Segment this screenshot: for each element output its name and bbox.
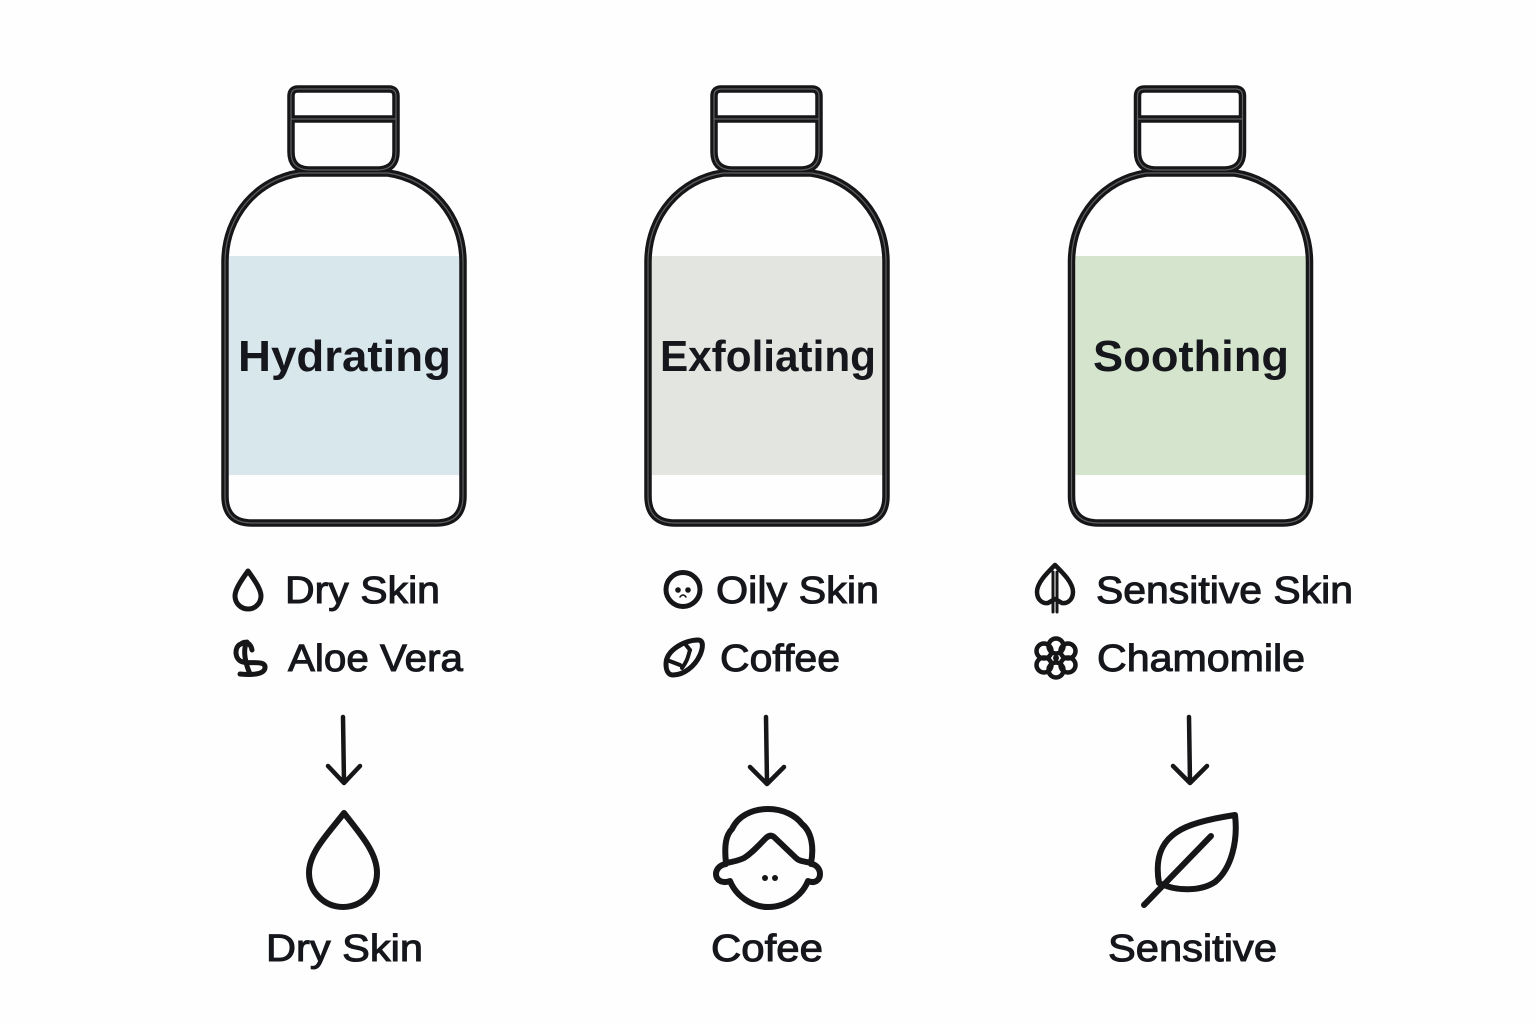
text: Cofee: Cofee: [711, 928, 823, 970]
text: Coffee: Coffee: [720, 638, 840, 680]
label: Hydrating: Hydrating: [238, 332, 451, 381]
text: Sensitive Skin: Sensitive Skin: [1096, 570, 1353, 612]
icon: coffee bean: [666, 640, 702, 675]
panel: exfoliating column: [648, 89, 886, 970]
text: Sensitive: Sensitive: [1108, 928, 1277, 970]
arrow: down: [1173, 717, 1207, 783]
icon: large leaf: [1144, 815, 1236, 905]
panel: soothing column: [1036, 89, 1353, 970]
text: Dry Skin result: Dry Skin: [266, 928, 423, 970]
text: Oily Skin: Oily Skin: [716, 570, 879, 612]
text: Chamomile: Chamomile: [1097, 638, 1305, 680]
icon: sensitive skin leaf: [1037, 565, 1073, 612]
icon: chamomile flower: [1036, 638, 1076, 678]
label: Soothing: Soothing: [1093, 332, 1289, 381]
text: Aloe Vera: Aloe Vera: [288, 638, 464, 680]
icon: face with hair: [716, 809, 820, 907]
panel: hydrating column: [225, 89, 464, 970]
text: Dry Skin: Dry Skin: [285, 570, 440, 612]
icon: small water drop: [235, 571, 261, 609]
label: Exfoliating: Exfoliating: [660, 332, 876, 381]
bottle: hydrating: [225, 89, 463, 523]
icon: large water drop: [309, 813, 377, 907]
bottle: exfoliating: [648, 89, 886, 523]
bottle: soothing: [1072, 89, 1310, 523]
icon: aloe vera: [236, 642, 265, 674]
icon: oily skin face: [666, 572, 700, 606]
arrow: down: [328, 717, 360, 783]
arrow: down: [750, 717, 784, 784]
